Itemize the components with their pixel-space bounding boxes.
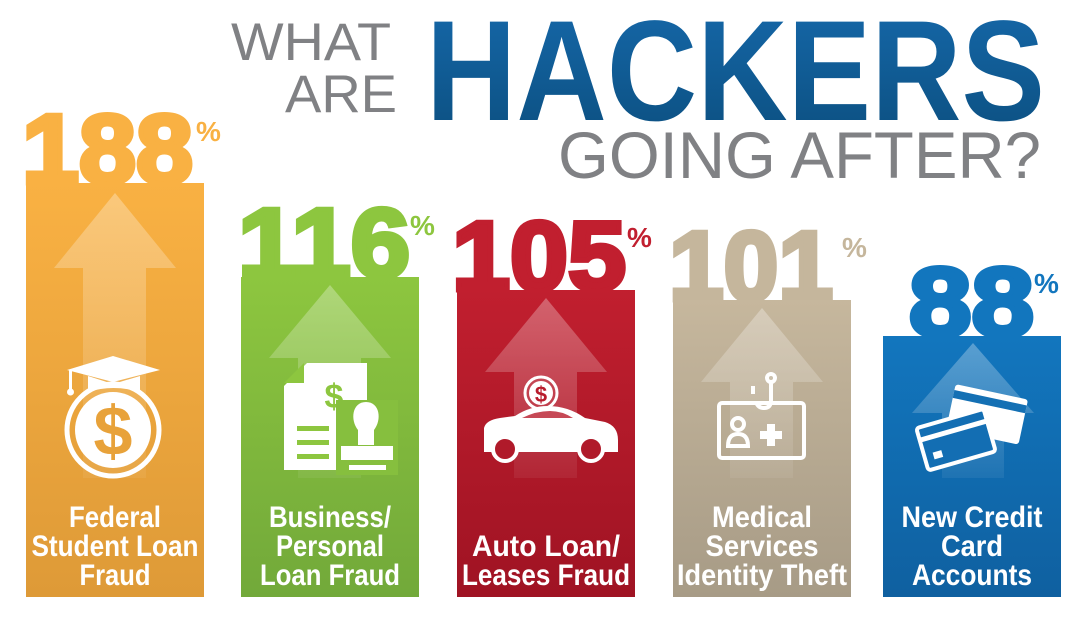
number 105%: 105 bbox=[452, 201, 626, 311]
number 88%: 88 bbox=[909, 247, 1034, 357]
title: GOING AFTER? bbox=[558, 118, 1041, 192]
icon: credit cards bbox=[916, 384, 1028, 471]
arrow bbox=[485, 298, 607, 478]
number 116%: % bbox=[410, 210, 435, 241]
arrow bbox=[269, 285, 391, 478]
label: Auto Loan/ bbox=[472, 530, 621, 563]
label bbox=[260, 501, 400, 592]
number 188%: 188 bbox=[22, 94, 193, 204]
number 101%: % bbox=[842, 232, 867, 263]
label: Loan Fraud bbox=[260, 559, 400, 592]
arrow bbox=[54, 193, 176, 478]
panel: new credit card accounts bbox=[883, 247, 1061, 597]
panel: federal student loan fraud bbox=[22, 94, 221, 597]
number 188%: % bbox=[196, 116, 221, 147]
label: Student Loan bbox=[32, 530, 198, 563]
label: Accounts bbox=[912, 559, 1032, 592]
title bbox=[231, 0, 1045, 192]
icon: car with coin bbox=[484, 377, 618, 461]
icon: graduation cap coin bbox=[67, 356, 160, 476]
icon: loan document and stamp bbox=[284, 363, 398, 475]
label: Leases Fraud bbox=[462, 559, 630, 592]
arrow bbox=[701, 308, 823, 478]
label bbox=[462, 530, 630, 592]
number 105%: % bbox=[627, 222, 652, 253]
label: Services bbox=[706, 530, 818, 563]
label: New Credit bbox=[902, 501, 1043, 534]
title: ARE bbox=[285, 65, 397, 124]
icon: graduation cap coin: $ bbox=[94, 392, 132, 470]
label: Identity Theft bbox=[677, 559, 847, 592]
label: Personal bbox=[276, 530, 384, 563]
number 116%: 116 bbox=[238, 188, 410, 298]
icon: car with coin: $ bbox=[535, 382, 547, 407]
panel: medical services identity theft bbox=[669, 211, 867, 597]
label: Medical bbox=[712, 501, 812, 534]
label bbox=[677, 501, 847, 592]
label: Business/ bbox=[269, 501, 392, 534]
title: WHAT bbox=[231, 13, 391, 72]
label bbox=[902, 501, 1043, 592]
label bbox=[32, 501, 198, 592]
panel: business personal loan fraud bbox=[238, 188, 435, 597]
panel: auto loan leases fraud bbox=[452, 201, 652, 597]
number 88%: % bbox=[1034, 268, 1059, 299]
number 101%: 101 bbox=[669, 211, 833, 321]
label: Card bbox=[941, 530, 1003, 563]
arrow bbox=[912, 343, 1034, 478]
label: Fraud bbox=[80, 559, 150, 592]
label: Federal bbox=[69, 501, 161, 534]
icon: loan document and stamp: $ bbox=[325, 378, 344, 416]
icon: medical id card with hook bbox=[719, 374, 804, 458]
